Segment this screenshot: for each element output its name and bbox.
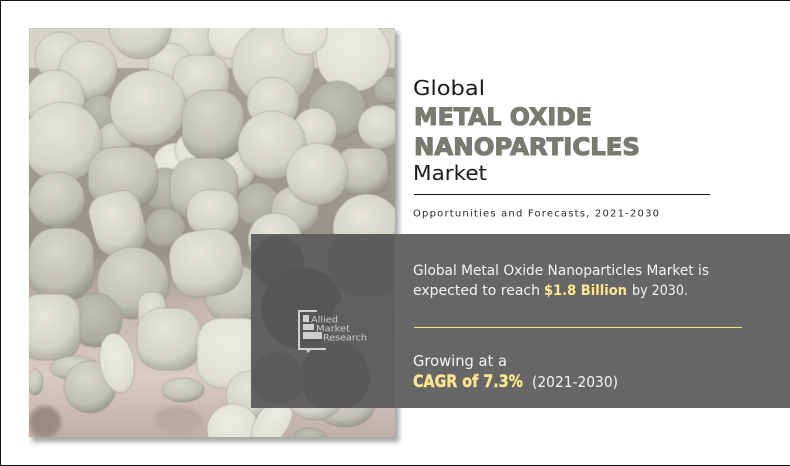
yellow divider <box>414 327 742 328</box>
title <box>413 76 640 185</box>
subtitle: Opportunities and Forecasts, 2021-2030 <box>413 208 659 220</box>
title line: Nanoparticles: NANOPARTICLES <box>414 133 640 161</box>
market size statement: Global Metal Oxide Nanoparticles Market is <box>413 263 709 279</box>
market size statement: by 2030. <box>632 283 688 299</box>
logo: Allied Market Research: Research <box>323 334 367 344</box>
CAGR statement <box>413 352 618 392</box>
market size statement <box>413 263 709 299</box>
title line: Market: Market <box>413 161 487 185</box>
CAGR statement: Growing at a <box>413 352 507 370</box>
logo: Allied Market Research: Allied <box>311 316 338 326</box>
highlight: market value: $1.8 Billion <box>544 283 627 299</box>
title line: Metal Oxide: METAL OXIDE <box>414 103 592 131</box>
title rule <box>414 194 710 195</box>
image shadow <box>32 32 399 442</box>
photo: nanoparticles <box>29 28 395 437</box>
logo: Allied Market Research <box>298 310 367 353</box>
dark info panel <box>251 222 790 412</box>
CAGR statement: (2021-2030) <box>532 373 618 391</box>
middle row <box>110 70 186 146</box>
highlight: CAGR: CAGR of 7.3% <box>413 372 523 392</box>
back row <box>29 28 395 68</box>
particles seen through panel <box>251 234 395 408</box>
lower row <box>29 228 94 300</box>
title line: Global: Global <box>413 76 485 100</box>
market size statement: expected to reach <box>413 283 540 299</box>
logo: Allied Market Research: Market <box>316 324 351 334</box>
